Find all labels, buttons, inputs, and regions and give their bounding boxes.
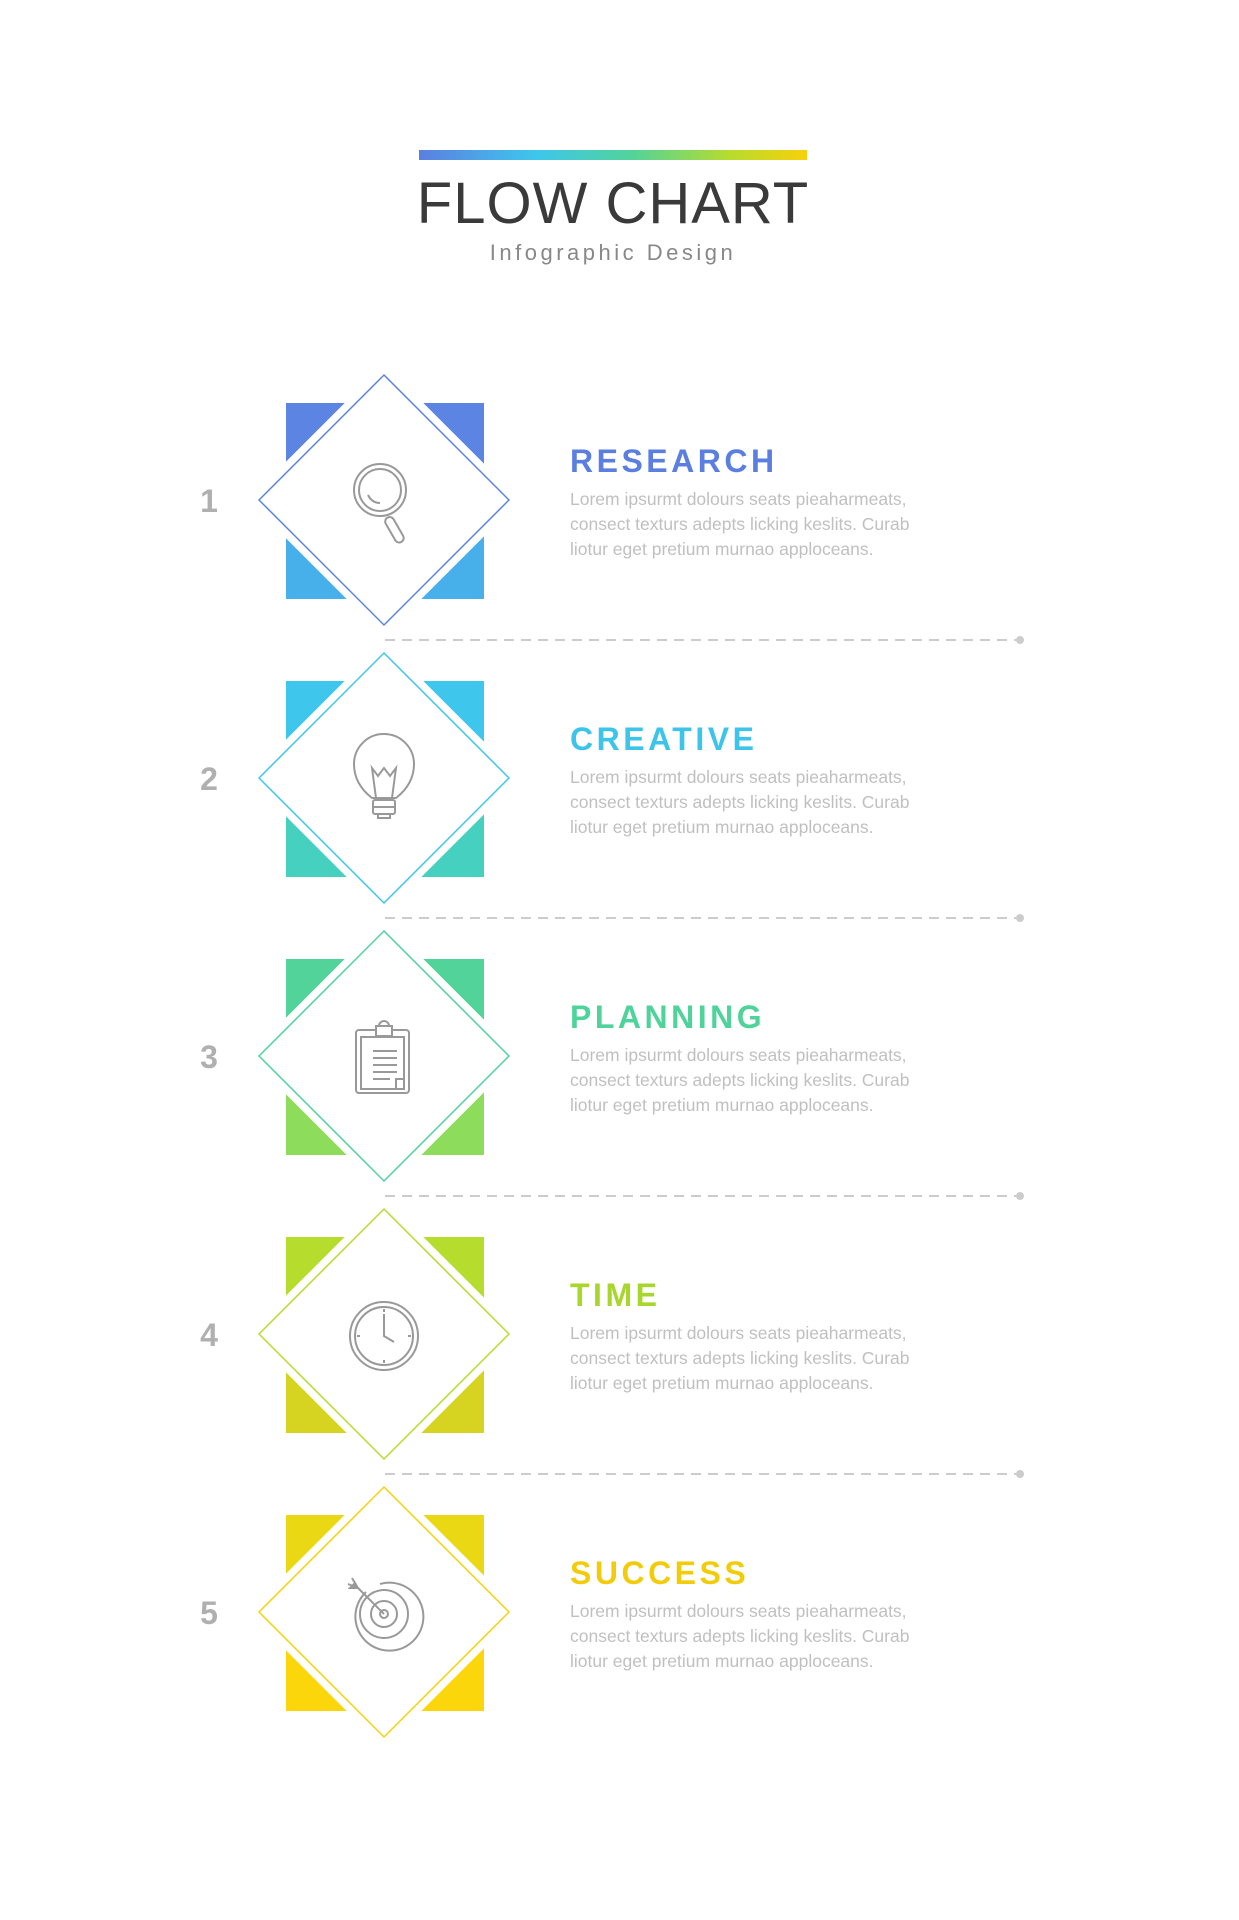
step 5: success (200, 1487, 909, 1737)
icon: light bulb (354, 734, 414, 818)
step 4: time: consect texturs adepts licking keslits. Curab (570, 1348, 909, 1368)
step 3: planning: consect texturs adepts licking keslits. Curab (570, 1070, 909, 1090)
step 3: planning: PLANNING (570, 999, 765, 1035)
step 5: success: Lorem ipsurmt dolours seats pieaharmeats, (570, 1601, 907, 1621)
step 2: creative: CREATIVE (570, 721, 757, 757)
step 2: creative: consect texturs adepts licking keslits. Curab (570, 792, 909, 812)
step 4: time: TIME (570, 1277, 660, 1313)
step 3: planning (200, 931, 909, 1181)
step 5: success: consect texturs adepts licking keslits. Curab (570, 1626, 909, 1646)
title: FLOW CHART (417, 171, 809, 236)
icon: target (348, 1578, 423, 1651)
step 4: time: liotur eget pretium murnao apploceans. (570, 1373, 874, 1393)
step 1: research: RESEARCH (570, 443, 778, 479)
title gradient bar (419, 150, 807, 160)
icon: clock (350, 1302, 418, 1370)
step 1: research: liotur eget pretium murnao apploceans. (570, 539, 874, 559)
step 4: time: 4 (200, 1317, 218, 1353)
step 4: time (200, 1209, 909, 1459)
step 1: research: 1 (200, 483, 218, 519)
step 1: research: Lorem ipsurmt dolours seats pieaharmeats, (570, 489, 907, 509)
step 5: success: liotur eget pretium murnao apploceans. (570, 1651, 874, 1671)
step 3: planning: liotur eget pretium murnao apploceans. (570, 1095, 874, 1115)
step 2: creative: liotur eget pretium murnao apploceans. (570, 817, 874, 837)
step 4: time: Lorem ipsurmt dolours seats pieaharmeats, (570, 1323, 907, 1343)
icon: clipboard (356, 1021, 409, 1093)
step 2: creative: 2 (200, 761, 218, 797)
step 3: planning: Lorem ipsurmt dolours seats pieaharmeats, (570, 1045, 907, 1065)
step 2: creative: Lorem ipsurmt dolours seats pieaharmeats, (570, 767, 907, 787)
step 1: research: consect texturs adepts licking keslits. Curab (570, 514, 909, 534)
step 2: creative (200, 653, 909, 903)
step 5: success: 5 (200, 1595, 218, 1631)
subtitle: Infographic Design (490, 240, 736, 265)
step 3: planning: 3 (200, 1039, 218, 1075)
icon: magnifier (354, 464, 406, 544)
step 5: success: SUCCESS (570, 1555, 749, 1591)
step 1: research (200, 375, 909, 625)
